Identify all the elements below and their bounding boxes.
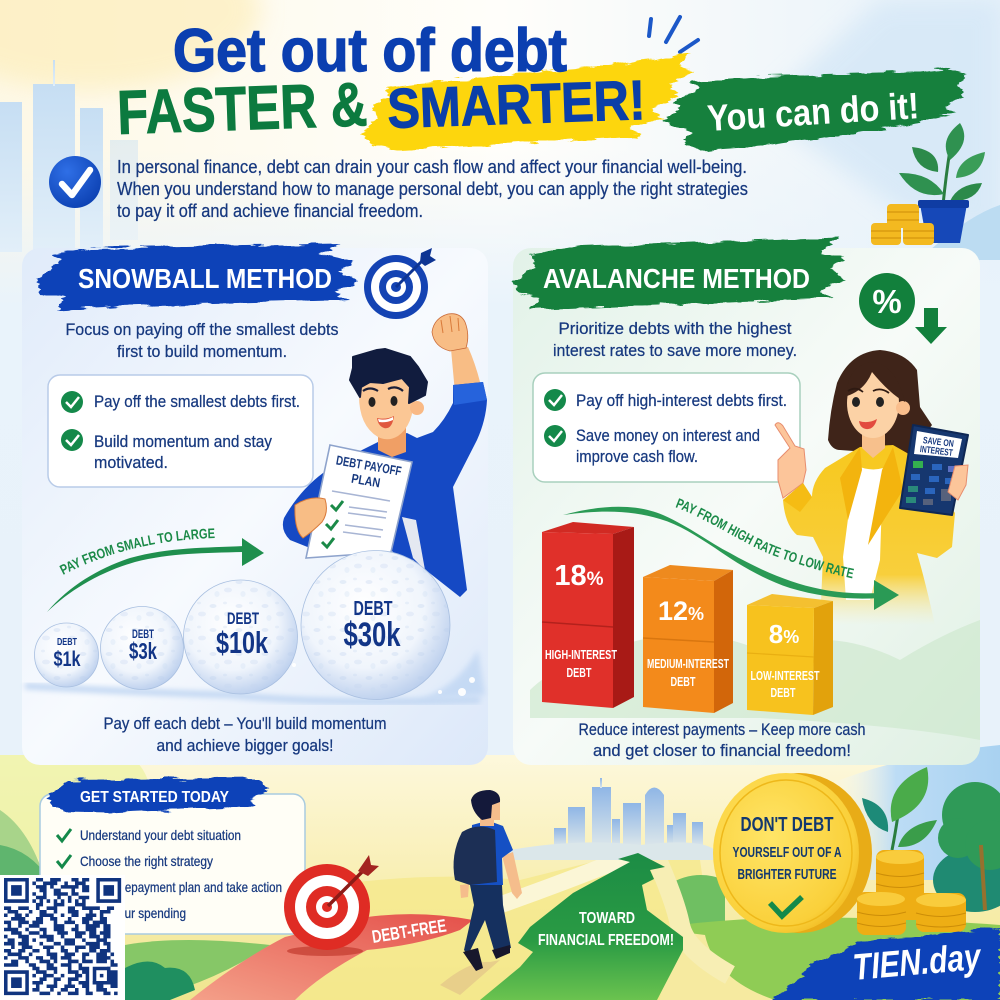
snowballs with debt amounts: DEBT: [227, 609, 259, 628]
pale hills behind chart: [530, 620, 980, 740]
icon: red target with arrow: [284, 855, 379, 956]
get started checklist: Understand your debt situation: [80, 827, 241, 843]
snowball checklist box: Build momentum and stay: [94, 432, 272, 451]
snowball description: Focus on paying off the smallest debts: [66, 320, 338, 339]
plan document: PLAN: [350, 471, 381, 490]
avalanche summary: and get closer to financial freedom!: [593, 741, 851, 760]
avalanche checklist box: [533, 373, 800, 482]
intro paragraph: to pay it off and achieve financial freedom.: [117, 201, 423, 221]
character: man with raised fist and plan: [283, 314, 487, 597]
get started checklist: [57, 827, 282, 921]
gold coin message: [713, 773, 872, 933]
intro paragraph: When you understand how to manage personal debt, you can apply the right strategies: [117, 179, 748, 199]
snowball checklist box: motivated.: [94, 453, 168, 472]
avalanche summary: Reduce interest payments – Keep more cash: [578, 720, 866, 739]
title: faster and: FASTER &: [116, 70, 368, 148]
city skyline, top left: [0, 60, 138, 254]
get started checklist: Track your spending: [80, 905, 186, 921]
bar: low interest: LOW-INTEREST: [750, 668, 820, 683]
green brush: you can do it: [662, 68, 968, 150]
get started heading: GET STARTED TODAY: [80, 789, 229, 806]
calculator: SAVE ON: [922, 435, 954, 450]
panel: bottom landscape: [0, 745, 1000, 1000]
character: walker with backpack: [440, 790, 522, 995]
yellow brush with smarter: [360, 54, 695, 150]
big green arrow: toward financial freedom: [480, 853, 683, 1000]
snowball checklist box: [48, 375, 313, 487]
icon: target with arrow: [364, 248, 436, 319]
snowballs with debt amounts: $30k: [344, 616, 401, 654]
intro paragraph: [117, 157, 748, 221]
get started heading: [48, 778, 268, 813]
snowballs with debt amounts: DEBT: [354, 598, 392, 620]
avalanche description: Prioritize debts with the highest: [558, 319, 792, 338]
bar: high interest: [542, 522, 634, 708]
bar: low interest: 8%: [769, 619, 799, 649]
get started checklist: Make a repayment plan and take action: [80, 879, 282, 895]
bar: high interest: 18%: [554, 560, 604, 592]
gold coin message: YOURSELF OUT OF A: [732, 844, 842, 861]
avalanche heading: AVALANCHE METHOD: [543, 263, 810, 294]
label: debt-free: DEBT-FREE: [370, 915, 448, 947]
panel: snowball method: [22, 242, 488, 765]
interest bar chart: [542, 522, 833, 715]
plan document: [306, 445, 412, 558]
snowball summary: [104, 714, 386, 755]
avalanche description: interest rates to save more money.: [553, 341, 797, 360]
brand badge: [772, 928, 1000, 1000]
snowballs with debt amounts: $10k: [216, 625, 269, 660]
snowball checklist box: Pay off the smallest debts first.: [94, 392, 300, 411]
yellow brush with smarter: SMARTER!: [386, 68, 646, 140]
calculator: [900, 425, 968, 515]
get started checklist: Choose the right strategy: [80, 853, 213, 869]
bar: medium interest: 12%: [658, 596, 704, 626]
avalanche heading: [514, 238, 846, 310]
get started box: [40, 778, 305, 934]
panel: avalanche method: [512, 236, 980, 765]
big green arrow: toward financial freedom: TOWARD: [579, 910, 635, 927]
QR code: [0, 875, 125, 1000]
character: woman with calculator: [775, 350, 968, 625]
leaves behind coin stack: [862, 767, 937, 850]
big green arrow: toward financial freedom: FINANCIAL FREEDOM!: [538, 932, 674, 949]
snowball heading: SNOWBALL METHOD: [78, 263, 332, 294]
snowballs with debt amounts: DEBT: [57, 637, 77, 648]
coin stacks: [857, 850, 966, 935]
bar: medium interest: [643, 565, 733, 713]
arrow: small to large: [47, 528, 264, 612]
distant city: [510, 778, 715, 860]
avalanche summary: [578, 720, 866, 760]
snowball description: [66, 320, 338, 361]
arrow: high rate to low rate: PAY FROM HIGH RATE TO LOW RATE: [676, 498, 854, 578]
arrow: small to large: PAY FROM SMALL TO LARGE: [59, 528, 215, 575]
plan document: DEBT PAYOFF: [335, 452, 403, 479]
icon: percent and down arrow: %: [872, 283, 902, 320]
avalanche checklist box: improve cash flow.: [576, 447, 698, 466]
gold coin message: BRIGHTER FUTURE: [738, 866, 836, 883]
bar: high interest: HIGH-INTEREST: [545, 647, 617, 662]
gold coin message: DON'T DEBT: [740, 814, 834, 836]
bar: medium interest: MEDIUM-INTEREST: [647, 656, 729, 671]
bar: low interest: DEBT: [770, 685, 796, 700]
bar: low interest: [747, 594, 833, 715]
tree, right: [933, 782, 1000, 912]
snowballs with debt amounts: $3k: [129, 638, 157, 664]
snowball summary: Pay off each debt – You'll build momentum: [104, 714, 386, 733]
green brush: you can do it: You can do it!: [706, 85, 920, 139]
bar: high interest: DEBT: [566, 665, 592, 680]
snowballs with debt amounts: $1k: [54, 648, 81, 671]
snowball heading: [36, 244, 358, 310]
icon: percent and down arrow: [859, 273, 947, 344]
icon: plant and coins: [871, 123, 985, 245]
calculator: INTEREST: [919, 444, 953, 459]
snowballs with debt amounts: [25, 550, 485, 702]
snowball description: first to build momentum.: [117, 342, 287, 361]
arrow: high rate to low rate: [563, 498, 899, 610]
title: get out of debt: Get out of debt: [173, 17, 567, 84]
spark ticks: [649, 17, 698, 52]
snowball summary: and achieve bigger goals!: [156, 736, 334, 755]
avalanche description: [553, 319, 797, 360]
avalanche checklist box: Pay off high-interest debts first.: [576, 391, 787, 410]
intro paragraph: In personal finance, debt can drain your cash flow and affect your financial well-being.: [117, 157, 747, 177]
avalanche checklist box: Save money on interest and: [576, 426, 760, 445]
icon: blue check circle: [49, 156, 101, 208]
road: red debt-free path: [190, 914, 473, 1000]
bar: medium interest: DEBT: [670, 674, 696, 689]
snowballs with debt amounts: DEBT: [132, 627, 154, 641]
